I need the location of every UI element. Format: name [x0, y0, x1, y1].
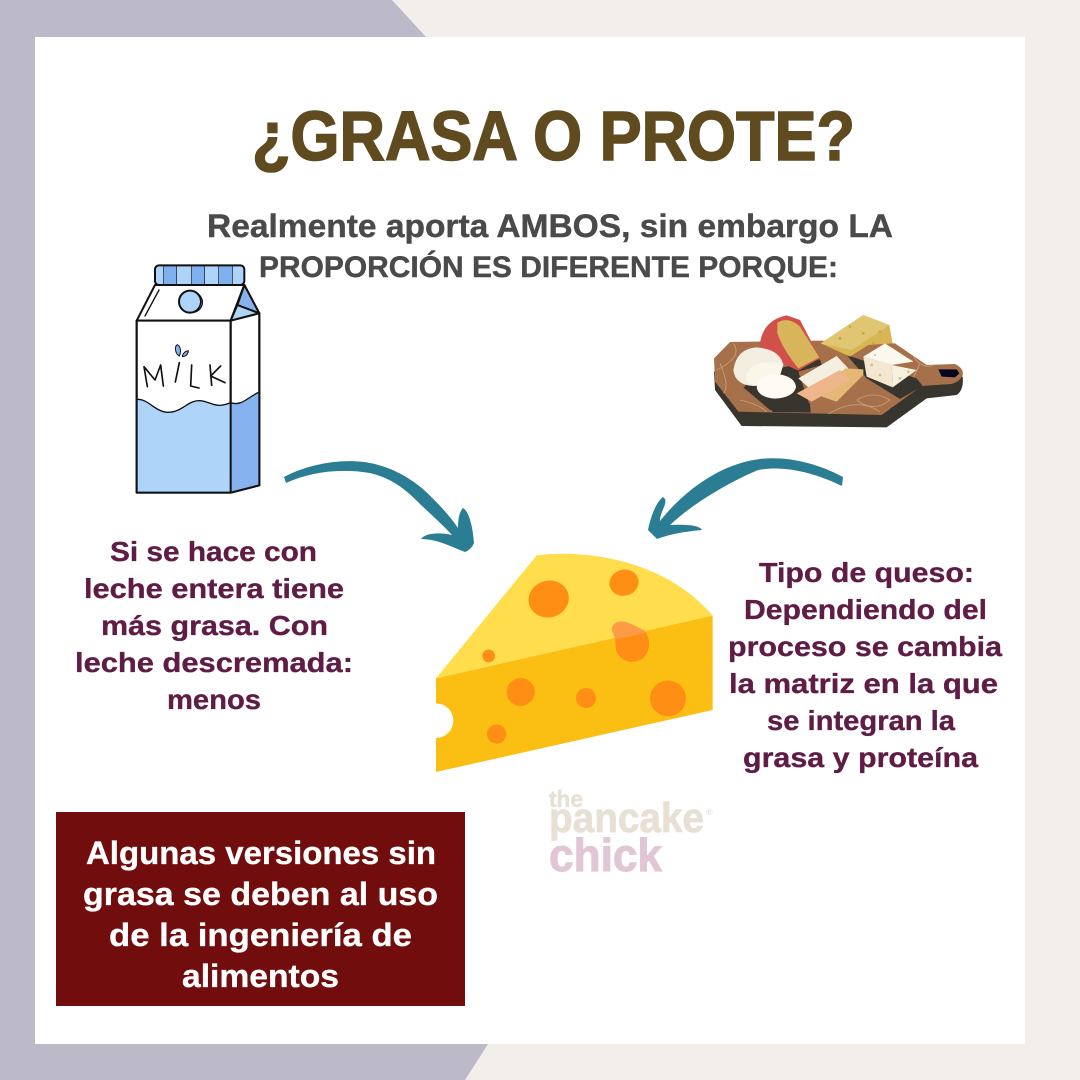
- callout: fat-free versions: Algunas versiones sin: [86, 835, 436, 871]
- callout: fat-free versions: de la ingeniería de: [109, 917, 412, 953]
- text: cheese type note: grasa y proteína: [743, 742, 979, 773]
- logo: the pancake chick: [549, 786, 713, 881]
- text: milk note: más grasa. Con: [101, 610, 328, 641]
- text: cheese type note: Dependiendo del: [744, 594, 987, 625]
- logo: the pancake chick: chick: [549, 829, 662, 881]
- subtitle: [207, 208, 893, 284]
- text: milk note: leche descremada:: [75, 647, 353, 678]
- text: milk note: Si se hace con: [110, 536, 317, 567]
- icon: milk carton: [137, 265, 259, 493]
- subtitle: PROPORCIÓN ES DIFERENTE PORQUE:: [259, 250, 838, 284]
- subtitle: Realmente aporta AMBOS, sin embargo LA: [207, 208, 893, 244]
- text: milk note: menos: [167, 684, 261, 715]
- text: cheese type note: [728, 557, 1003, 773]
- text: cheese type note: se integran la: [767, 705, 956, 736]
- text: cheese type note: Tipo de queso:: [759, 557, 974, 588]
- callout: fat-free versions: alimentos: [182, 958, 339, 994]
- icon: cheese wedge: [436, 554, 713, 772]
- arrow: board to cheese: [648, 458, 843, 539]
- text: milk note: [75, 536, 353, 715]
- logo: the pancake chick: pancake: [549, 794, 704, 841]
- arrow: milk to cheese: [284, 461, 474, 552]
- title: ¿GRASA O PROTE?: [252, 97, 855, 175]
- text: cheese type note: proceso se cambia: [728, 631, 1003, 662]
- icon: cheese board: [714, 315, 963, 427]
- text: cheese type note: la matriz en la que: [729, 668, 998, 699]
- callout: fat-free versions: grasa se deben al uso: [83, 876, 438, 912]
- logo: the pancake chick: ®: [706, 807, 713, 817]
- callout: fat-free versions: [56, 812, 465, 1006]
- text: milk note: leche entera tiene: [84, 573, 344, 604]
- logo: the pancake chick: the: [549, 786, 583, 812]
